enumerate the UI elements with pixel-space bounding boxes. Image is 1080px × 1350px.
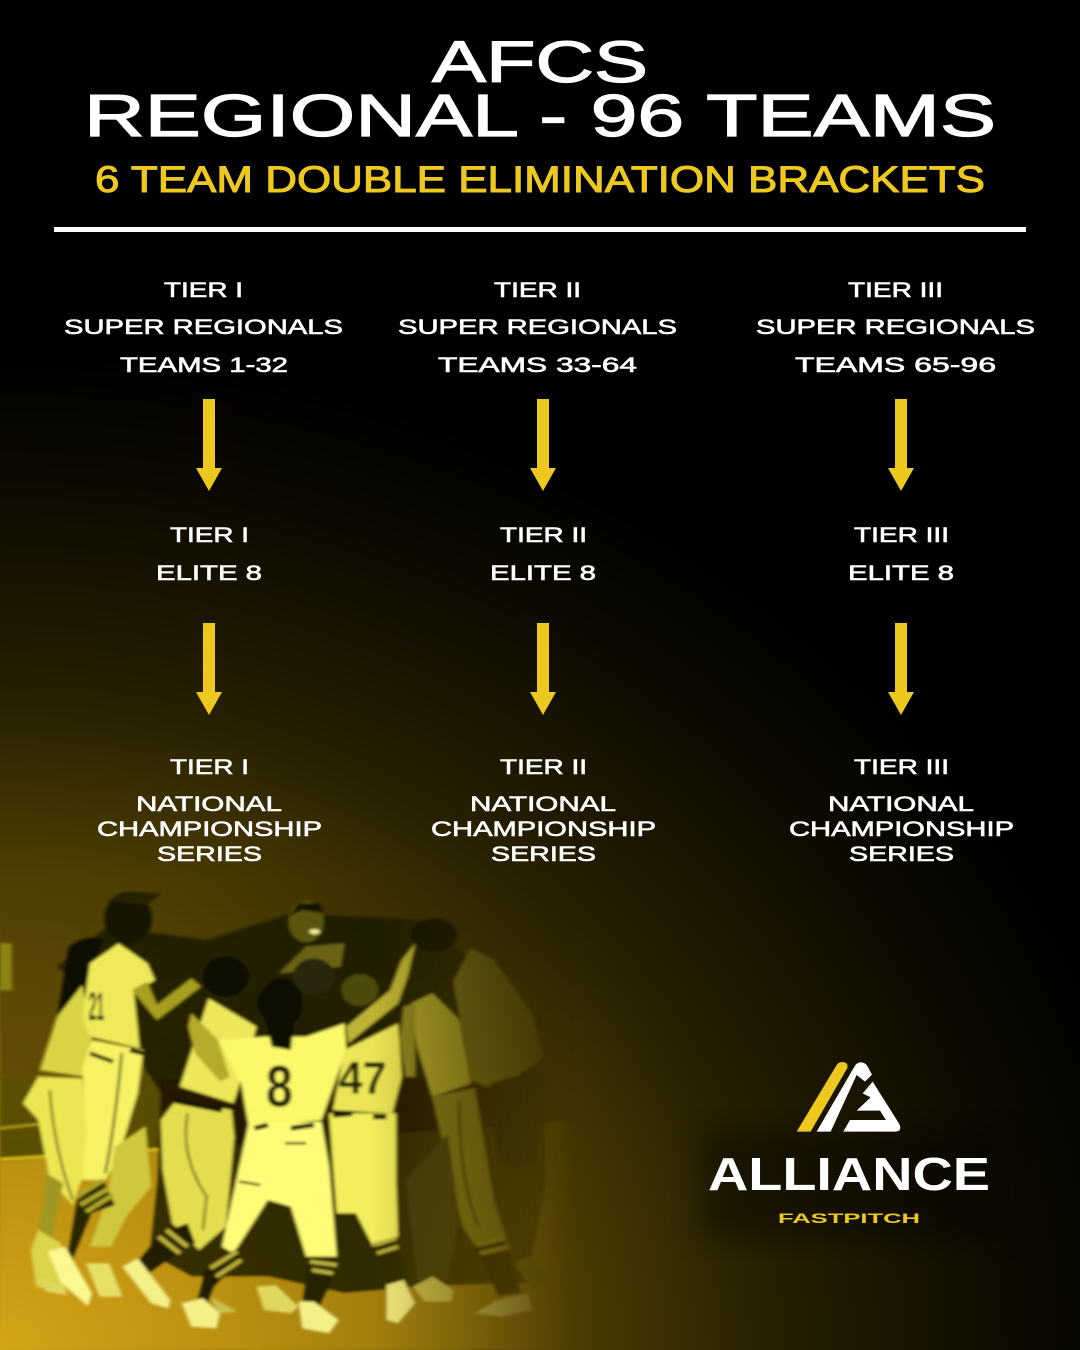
player number 8: [182, 943, 415, 1333]
middle-left player: [122, 998, 256, 1308]
tier I elite 8: TIER I: [170, 524, 249, 547]
title: [84, 30, 996, 149]
tier III super regionals: SUPER REGIONALS: [756, 316, 1035, 339]
arrow: [530, 399, 556, 491]
tier II super regionals: TEAMS 33-64: [438, 354, 637, 377]
arrow: [888, 623, 914, 715]
tier I elite 8: [156, 524, 262, 585]
logo tagline: FASTPITCH: [778, 1210, 920, 1226]
tier III super regionals: TEAMS 65-96: [795, 354, 996, 377]
title line 2: REGIONAL - 96 TEAMS: [84, 83, 996, 149]
tier II national championship series: NATIONAL: [470, 793, 616, 816]
tier II super regionals: [398, 279, 677, 377]
column: tier II: [398, 279, 677, 866]
dark crowd mass behind the players: [57, 913, 547, 1293]
jumping player number 21: 21: [89, 985, 104, 1029]
tier III national championship series: TIER III: [854, 756, 949, 779]
column: tier III: [756, 279, 1035, 866]
tier III elite 8: [848, 524, 954, 585]
field dirt and grass: [0, 916, 550, 1350]
right player and coach: [400, 918, 549, 1317]
arrow: [196, 399, 222, 491]
logo wordmark: ALLIANCE: [708, 1148, 990, 1200]
tier I national championship series: TIER I: [170, 756, 249, 779]
tier II super regionals: SUPER REGIONALS: [398, 316, 677, 339]
tier I national championship series: [97, 756, 322, 866]
tier I national championship series: NATIONAL: [136, 793, 282, 816]
tier II national championship series: [431, 756, 656, 866]
subtitle: 6 TEAM DOUBLE ELIMINATION BRACKETS: [95, 159, 985, 200]
tier III elite 8: ELITE 8: [848, 562, 954, 585]
tier I national championship series: CHAMPIONSHIP: [97, 818, 322, 841]
tier III super regionals: [756, 279, 1035, 377]
tier II national championship series: CHAMPIONSHIP: [431, 818, 656, 841]
player number 47: [329, 975, 415, 1323]
tier I super regionals: [64, 279, 343, 377]
tier I super regionals: TEAMS 1-32: [120, 354, 288, 377]
celebrating coach head: [203, 901, 378, 1023]
tier I national championship series: SERIES: [157, 843, 262, 866]
tier I super regionals: TIER I: [164, 279, 243, 302]
arrow: [530, 623, 556, 715]
tier III elite 8: TIER III: [854, 524, 949, 547]
tier I super regionals: SUPER REGIONALS: [64, 316, 343, 339]
photo: softball team celebrating: [0, 890, 546, 1350]
tier II national championship series: SERIES: [491, 843, 596, 866]
header divider: [54, 227, 1026, 232]
tier III national championship series: SERIES: [849, 843, 954, 866]
tier II super regionals: TIER II: [494, 279, 581, 302]
tier II elite 8: [490, 524, 596, 585]
tier III national championship series: [789, 756, 1014, 866]
tier III national championship series: NATIONAL: [828, 793, 974, 816]
tier II national championship series: TIER II: [500, 756, 587, 779]
far left player: [23, 938, 103, 1293]
logo: Alliance Fastpitch: [700, 1062, 1000, 1240]
arrow: [196, 623, 222, 715]
player number 47: 47: [339, 1053, 387, 1104]
tier I elite 8: ELITE 8: [156, 562, 262, 585]
arrow: [888, 399, 914, 491]
player number 8: 8: [266, 1055, 293, 1120]
tier III national championship series: CHAMPIONSHIP: [789, 818, 1014, 841]
tier II elite 8: TIER II: [500, 524, 587, 547]
logo soft shadow: [700, 1130, 1000, 1240]
tier II elite 8: ELITE 8: [490, 562, 596, 585]
logo mark: [797, 1062, 900, 1132]
title line 1: AFCS: [432, 30, 648, 95]
tier III super regionals: TIER III: [848, 279, 943, 302]
jumping player number 21: [38, 892, 201, 1306]
column: tier I: [64, 279, 343, 866]
